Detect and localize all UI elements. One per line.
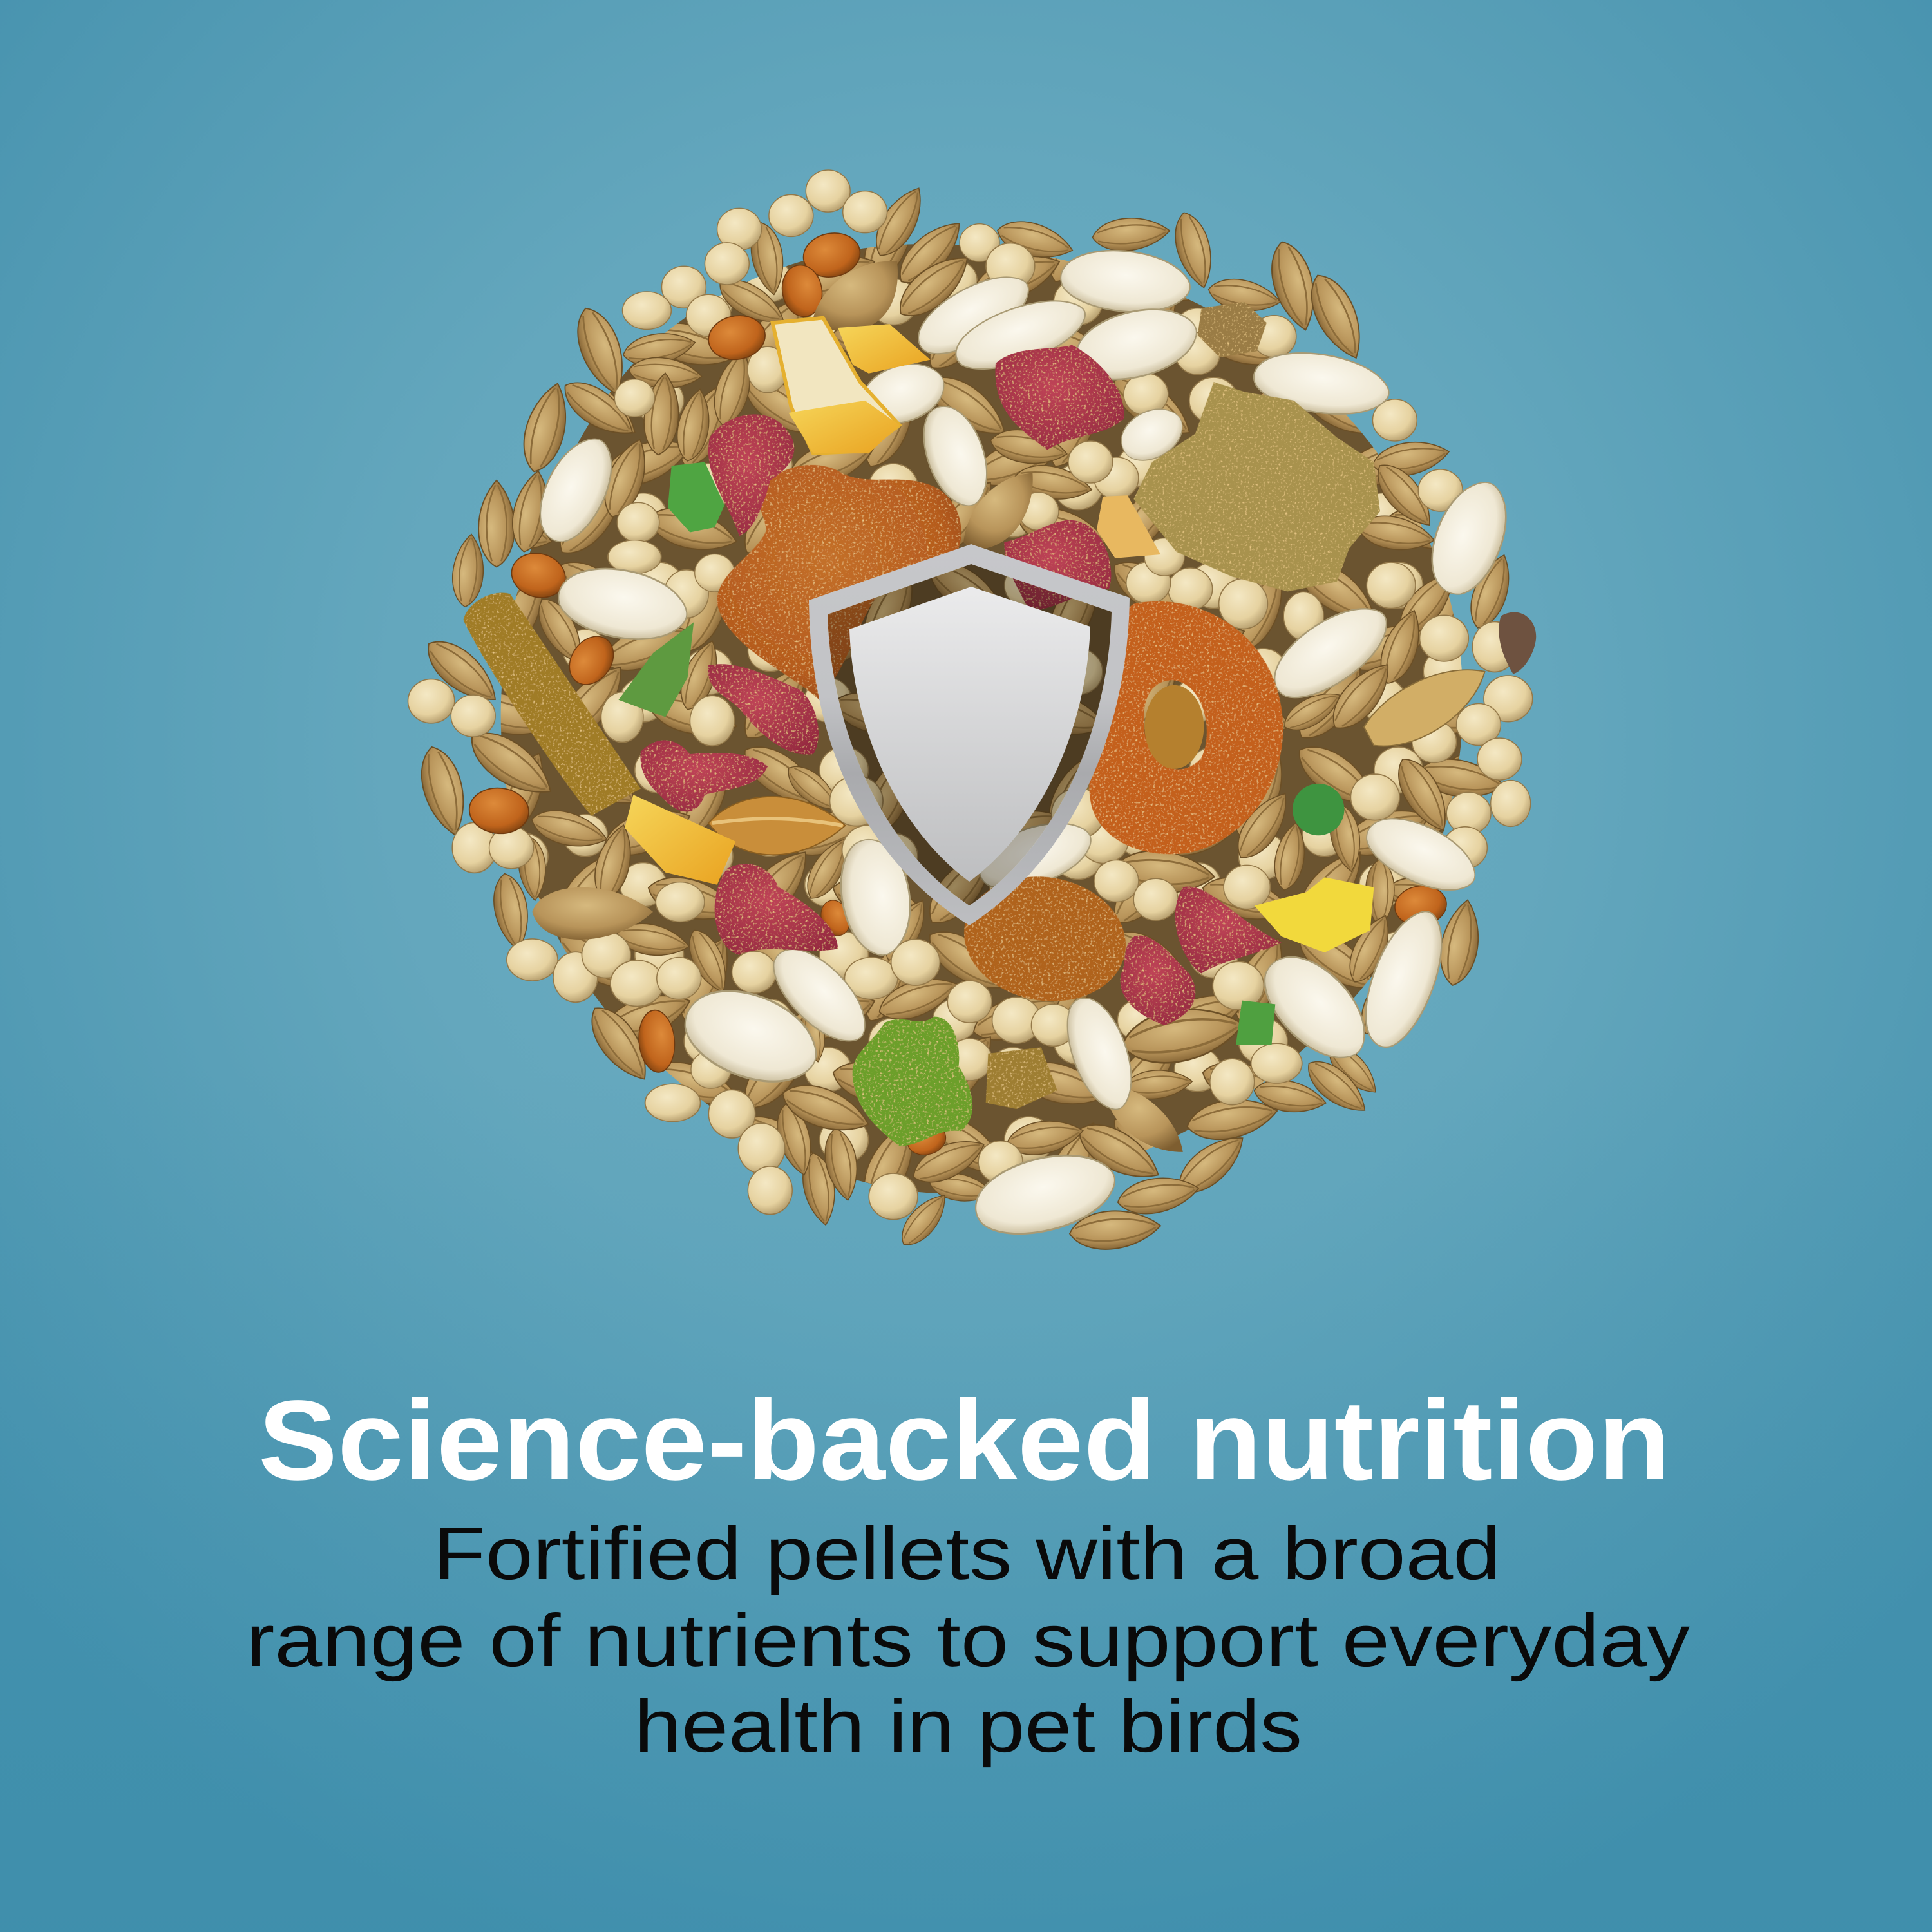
seed and pellet pile <box>408 170 1536 1253</box>
description text: health in pet birds <box>634 1684 1302 1768</box>
long stick pellet <box>463 593 641 816</box>
orange ring pellet <box>1089 601 1283 854</box>
green pellets <box>618 462 1344 1146</box>
barley seeds <box>413 180 1519 1253</box>
round cream seeds <box>408 170 1533 1220</box>
heading: Science-backed nutrition <box>258 1378 1671 1504</box>
description text: Fortified pellets with a broad <box>433 1511 1501 1595</box>
shield inner plate <box>849 587 1090 882</box>
beige biscuit <box>1133 382 1380 591</box>
orange round pellet <box>954 864 1135 1014</box>
seed seen through ring pellet hole <box>1144 685 1204 769</box>
white sunflower kernels <box>527 245 1520 1247</box>
seed-filled backing of pile <box>501 244 1463 1194</box>
orange pellets <box>463 302 1380 1109</box>
shield outer ring <box>809 544 1130 925</box>
tan nuts and oats <box>533 261 1536 1152</box>
red pellets <box>640 345 1282 1025</box>
description text <box>246 1511 1690 1768</box>
orange star pellet <box>717 465 961 700</box>
orange millet seeds <box>468 229 1449 1159</box>
description text: range of nutrients to support everyday <box>246 1598 1690 1682</box>
small biscuits <box>1198 302 1267 357</box>
shield darkened interior <box>828 564 1112 905</box>
corn pieces <box>625 318 1374 952</box>
shield icon <box>809 544 1130 925</box>
